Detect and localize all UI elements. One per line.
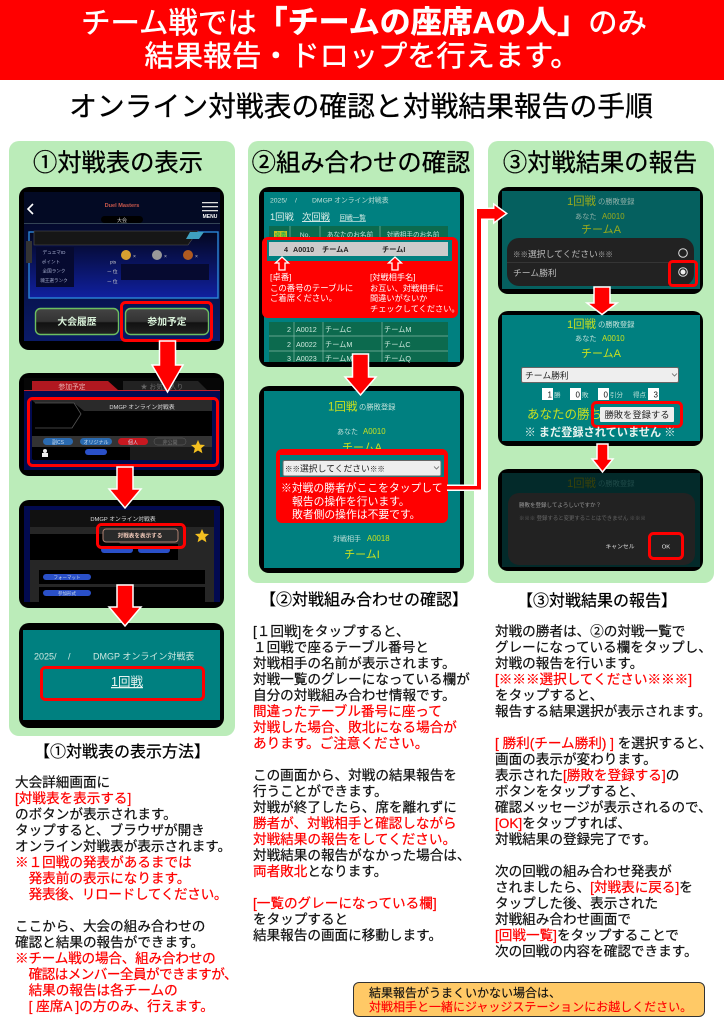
tournament card: 副CS [52, 439, 65, 446]
player card: 全国ランク [43, 268, 65, 274]
tournament card: オリジナル [83, 440, 109, 446]
screenshot: tournament detail [19, 500, 224, 608]
icon: star [195, 529, 209, 542]
score inputs: 勝 [554, 390, 561, 399]
screenshot: result entry select: A0010 [363, 427, 386, 436]
screenshot: match table: DMGP オンライン対戦表 [312, 196, 389, 204]
screenshot: result register form: ※ まだ登録されていません ※ [525, 425, 675, 439]
icon: user [42, 449, 48, 457]
banner line 2: 結果報告・ドロップを行えます。 [145, 41, 579, 73]
player card: 魂王選ランク [40, 277, 68, 284]
screenshot: confirmation dialog [498, 469, 703, 571]
score inputs: 得点 [633, 390, 646, 399]
table rows: A0022 [296, 340, 317, 349]
heading: step 2 method: 【②対戦組み合わせの確認】 [260, 592, 468, 609]
button: 大会履歴: 大会履歴 [57, 315, 97, 328]
tournament card [32, 400, 212, 460]
radio: unselected [679, 249, 687, 257]
screenshot: result register form: あなた [575, 334, 597, 343]
button: 大会履歴 [36, 308, 118, 334]
screenshot: confirmation dialog: の勝敗登録 [598, 479, 635, 488]
table rows: チームC [325, 325, 352, 334]
table rows: チームQ [384, 354, 411, 363]
callout text: table number [270, 272, 353, 303]
arrow: step 1 down 2 [109, 467, 141, 508]
screenshot: result entry select [259, 386, 464, 573]
highlight: 勝敗を登録する [592, 402, 682, 426]
screenshot: online bracket top: DMGP オンライン対戦表 [93, 650, 194, 662]
player card: × [164, 254, 167, 260]
screenshot: tournament page [19, 187, 224, 350]
arrow: step 3 down 2 [592, 444, 613, 472]
select box [283, 460, 441, 476]
select box: ※※選択してください※※ [285, 462, 385, 474]
heading: step 3 method: 【③対戦結果の報告】 [517, 593, 677, 610]
score inputs [542, 388, 659, 400]
callout: table number and opponent: チームI [382, 245, 405, 254]
heading: step 1 method: 【①対戦表の表示方法】 [34, 744, 210, 761]
player card: × [133, 254, 136, 260]
callout text: 敗者側の操作は不要です。 [292, 507, 420, 521]
arrow: to table number [276, 257, 288, 270]
screenshot: tournament detail: DMGP オンライン対戦表 [90, 515, 156, 523]
table header [269, 226, 448, 240]
callout text line 1: 結果報告がうまくいかない場合は、 [369, 986, 561, 1000]
button: 参加予定: 参加予定 [147, 315, 187, 328]
table rows: A0023 [296, 354, 317, 363]
panel: step 1 background [9, 141, 235, 736]
dialog: キャンセル [606, 544, 635, 550]
arrow: to opponent [388, 257, 402, 270]
screenshot: dark selection dialog: A0010 [602, 212, 625, 221]
score inputs: 0 [604, 390, 609, 400]
score inputs: 3 [654, 390, 659, 400]
screenshot: result register form: チームA [581, 347, 622, 360]
screenshot: result entry select: の勝敗登録 [359, 402, 396, 412]
callout text: table number: [卓番] [270, 272, 291, 282]
score inputs: 引分 [610, 390, 624, 399]
screenshot: result register form: 1回戦 [567, 318, 597, 331]
icon: back chevron [28, 204, 33, 214]
heading: step 3: ③対戦結果の報告 [503, 150, 697, 177]
player card: ポイント [42, 258, 60, 264]
panel: step 3 background [488, 141, 714, 583]
table header: No. [300, 232, 310, 239]
logo text: Duel Masters [105, 203, 139, 209]
screenshot: result register form: A0010 [602, 334, 625, 343]
table rows: チームM [384, 325, 411, 334]
table rows: A0012 [296, 325, 317, 334]
screenshot: online bracket top [19, 623, 224, 728]
button: 対戦表を表示する [103, 529, 178, 542]
screenshot: dark selection dialog [498, 187, 703, 294]
callout: table number and opponent: チームA [322, 245, 349, 254]
callout text: table number: ご着席ください。 [270, 293, 337, 303]
tournament card: 個人 [128, 439, 138, 446]
button: 参加予定 [126, 308, 208, 334]
icon: menu: MENU [203, 214, 218, 220]
arrow: step 1 down 3 [109, 585, 141, 626]
score inputs: 1 [548, 390, 553, 400]
tab: 参加予定 [32, 381, 118, 391]
score inputs: 0 [576, 390, 581, 400]
heading: step 1: ①対戦表の表示 [33, 150, 203, 177]
tab: お気に入り [123, 381, 207, 391]
highlight: radio [670, 262, 696, 286]
tab: 参加予定: 参加予定 [58, 382, 86, 391]
player card: デュエマID [43, 249, 66, 256]
highlight: 1回戦 [42, 668, 204, 700]
dialog: ※※※ 登録すると変更することはできません ※※※ [519, 514, 646, 522]
tab: お気に入り: ★ お気に入り [141, 382, 183, 391]
text: step 1 instructions: 大会詳細画面に [対戦表を表示する] のボタンが表示されます。 タップすると、ブラウザが開き オンライン対戦表が表示されます。 ※１回戦の発表があるまでは 発表前の表示になります。 発表後、リロードしてください。 ここから、大会の組み合わせの 確認と結果の報告ができます。 ※チーム戦の場合、組み合わせの 確認はメンバー全員ができますが、 結果の報告は各チームの [ 座席A ]の方のみ、行えます。 [15, 775, 237, 1014]
screenshot: match table: 1回戦 [270, 211, 294, 222]
banner: red notice [0, 0, 724, 80]
callout text: opponent: チェックしてください。 [370, 304, 460, 314]
screenshot: result entry select: チームA [342, 441, 383, 454]
tournament card: 非公開 [162, 439, 178, 446]
screenshot: result entry select: チームI [344, 548, 380, 561]
table rows: チームC [384, 340, 411, 349]
screenshot: match table: 回戦一覧 [340, 213, 366, 222]
callout text [281, 480, 443, 521]
button: 対戦表を表示する: 対戦表を表示する [118, 532, 162, 540]
player card [26, 231, 218, 298]
select box [522, 368, 678, 382]
pills behind [101, 547, 170, 553]
player card: ー 位 [107, 278, 118, 284]
highlight: 参加予定 [122, 302, 212, 340]
table header: あなたのお名前 [327, 230, 373, 239]
screenshot: result register form: の勝敗登録 [598, 320, 635, 329]
arrow: step 1 down 1 [152, 341, 183, 392]
row: entry type [39, 587, 205, 602]
row: format [39, 570, 205, 584]
dialog: OK [662, 544, 670, 550]
table rows: 3 [287, 354, 291, 363]
callout: trouble reporting [353, 982, 705, 1017]
dialog: ※※選択してください※※ [513, 248, 613, 259]
player card: × [195, 254, 198, 260]
screenshot: dark selection dialog: あなた [575, 212, 597, 221]
link: 1回戦: 1回戦 [111, 675, 143, 689]
screenshot: result register form [498, 311, 703, 446]
screenshot: dark selection dialog: 1回戦 [567, 195, 597, 208]
dialog: 勝敗を登録してよろしいですか？ [519, 501, 601, 509]
highlight: 対戦表を表示する [98, 524, 184, 548]
table rows [269, 322, 448, 363]
highlight: tournament card [28, 398, 218, 466]
screenshot: dark selection dialog: チームA [581, 223, 622, 236]
tab label pill: 大会 [117, 217, 127, 224]
screenshot: tournament list [19, 373, 224, 476]
callout text: 報告の操作を行います。 [292, 494, 410, 508]
row: entry type: 参加形式 [58, 590, 76, 597]
dialog [507, 238, 696, 286]
table rows: 2 [287, 340, 291, 349]
table header: 卓番 [274, 231, 287, 239]
player card: ー 位 [107, 268, 118, 274]
arrow: step 3 down 1 [587, 287, 617, 314]
button: 勝敗を登録する [600, 407, 674, 422]
screenshot: match table: 次回戦 [302, 211, 331, 222]
callout text: opponent: [対戦相手名] [370, 272, 416, 282]
select box: チーム勝利 [525, 370, 569, 380]
arrow: step 2 down [345, 354, 376, 395]
dialog: チーム勝利 [513, 267, 557, 278]
screenshot: result entry select: あなた [337, 428, 358, 436]
screenshot: confirmation dialog: 1回戦 [567, 477, 597, 490]
row: format: フォーマット [54, 575, 80, 581]
table header: 対戦相手のお名前 [387, 230, 440, 239]
dialog [508, 493, 695, 565]
title: オンライン対戦表の確認と対戦結果報告の手順 [69, 91, 653, 122]
text: step 3 instructions: 対戦の勝者は、②の対戦一覧で グレーになっている欄をタップし、 対戦の報告を行います。 [※※※選択してください※※※] をタップすると、 報告する結果選択が表示されます。 [ 勝利(チーム勝利) ] を選択すると、 画面の表示が変わります。 表示された[勝敗を登録する]の ボタンをタップすると、 確認メッセージが表示されるので、 [OK]をタップすれば、 対戦結果の登録完了です。 次の回戦の組み合わせ発表が されましたら、[対戦表に戻る]を タップした後、表示された 対戦組み合わせ画面で [回戦一覧]をタップすることで 次の回戦の内容を確認できます。 [495, 624, 712, 959]
callout: winner taps here [276, 449, 448, 523]
table rows: チームM [325, 354, 352, 363]
banner line 1: チーム戦では「チームの座席Aの人」のみ [81, 5, 647, 40]
screenshot: match table [259, 187, 464, 367]
screenshot: result entry select: A0018 [367, 534, 390, 543]
text: step 2 instructions: [１回戦]をタップすると、 １回戦で座るテーブル番号と 対戦相手の名前が表示されます。 対戦一覧のグレーになっている欄が 自分の対戦組み合わせ情報です。 間違ったテーブル番号に座って 対戦した場合、敗北になる場合が あります。ご注意ください。 この画面から、対戦の結果報告を 行うことができます。 対戦が終了したら、席を離れずに 勝者が、対戦相手と確認しながら 対戦結果の報告をしてください。 対戦結果の報告がなかった場合は、 両者敗北となります。 [一覧のグレーになっている欄] をタップすると 結果報告の画面に移動します。 [253, 624, 470, 943]
callout: table number and opponent [262, 237, 460, 318]
callout: table number and opponent: 4 [284, 245, 288, 254]
player card: pts [110, 260, 117, 264]
table rows: 2 [287, 325, 291, 334]
tab label pill [101, 216, 143, 224]
radio: selected [679, 268, 687, 276]
callout text: ※対戦の勝者がここをタップして [281, 480, 443, 494]
button: 勝敗を登録する: 勝敗を登録する [604, 409, 670, 420]
screenshot: result entry select: 1回戦 [328, 400, 358, 414]
screenshot: online bracket top: / [68, 652, 71, 662]
screenshot: match table: 2025/ [270, 198, 287, 204]
icon: star [191, 440, 205, 453]
screenshot: online bracket top: 2025/ [34, 652, 57, 662]
highlight: OK [650, 534, 682, 558]
screenshot: dark selection dialog: の勝敗登録 [598, 197, 635, 206]
tournament card: DMGP オンライン対戦表 [109, 403, 175, 411]
panel: step 2 background [248, 141, 474, 583]
callout: table number and opponent: A0010 [293, 245, 314, 254]
screenshot: match table: / [295, 198, 297, 204]
table rows: チームM [325, 340, 352, 349]
callout text line 2: 対戦相手と一緒にジャッジステーションにお越しください。 [369, 1000, 692, 1014]
callout text: table number: この番号のテーブルに [270, 283, 353, 293]
screenshot: result entry select: 対戦相手 [333, 534, 361, 543]
callout text: opponent: お互い、対戦相手に [370, 283, 444, 293]
arrow: connector from step 2 to step 3 [447, 202, 508, 491]
score inputs: 敗 [582, 390, 589, 399]
callout text: opponent [370, 272, 460, 314]
screenshot: result register form: あなたの勝ち [527, 406, 602, 422]
callout text: opponent: 間違いがないか [370, 293, 427, 303]
heading: step 2: ②組み合わせの確認 [252, 150, 470, 177]
icon: menu [202, 202, 218, 220]
